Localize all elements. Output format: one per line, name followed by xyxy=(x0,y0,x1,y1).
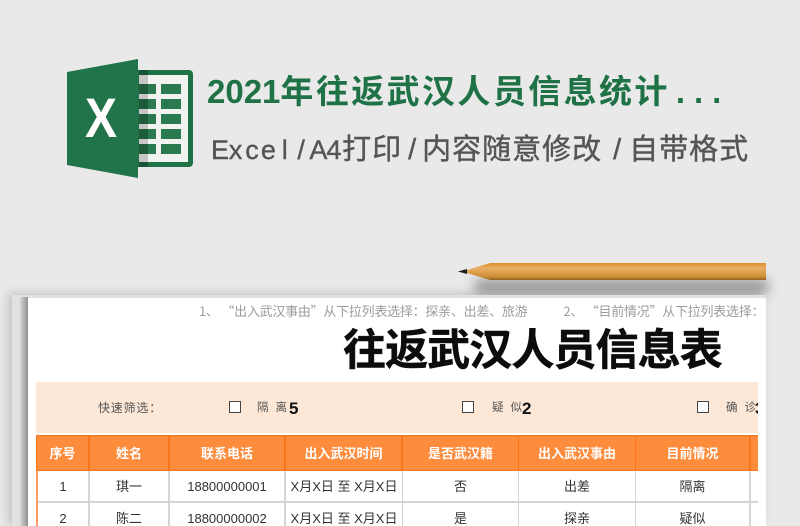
subtitle: l xyxy=(282,135,288,165)
table header band xyxy=(36,435,758,471)
sheet title: 往返武汉人员信息表 xyxy=(343,327,722,375)
icon: pencil xyxy=(458,263,766,280)
icon: Excel logo: X xyxy=(85,86,117,149)
label: isolated: 隔离 xyxy=(257,402,294,414)
row 2: 探亲 xyxy=(564,511,590,526)
header cells: 序号 xyxy=(49,446,76,461)
subtitle: 4 xyxy=(326,135,341,165)
paper inner shadow xyxy=(20,297,28,526)
subtitle: x xyxy=(229,135,242,165)
row 2: X月X日 至 X月X日 xyxy=(291,511,397,526)
table xyxy=(36,435,758,526)
subtitle: / xyxy=(408,134,416,166)
count: suspected: 2 xyxy=(522,399,531,418)
row 2: 2 xyxy=(59,511,67,526)
header cells: 联系电话 xyxy=(201,446,253,461)
subtitle: A xyxy=(309,135,327,165)
subtitle: E xyxy=(211,135,229,165)
row 1: X月X日 至 X月X日 xyxy=(291,479,397,494)
subtitle: e xyxy=(261,135,276,165)
row 1: 隔离 xyxy=(679,479,706,494)
subtitle: c xyxy=(245,135,259,165)
header cells: 出入武汉时间 xyxy=(304,446,382,461)
pencil shadow xyxy=(475,280,768,293)
header cells: 目前情况 xyxy=(666,446,718,461)
subtitle: / xyxy=(297,135,305,165)
row 2 xyxy=(38,503,758,526)
row 1: 琪一 xyxy=(116,479,142,494)
row 2: 疑似 xyxy=(679,511,706,526)
checkbox: suspected xyxy=(462,401,474,413)
count: isolated: 5 xyxy=(289,399,298,418)
title: 2021年往返武汉人员信息统计... xyxy=(207,73,730,110)
checkbox: isolated xyxy=(229,401,241,413)
row 2: 是 xyxy=(454,511,467,526)
table left border xyxy=(36,471,38,526)
row 1: 出差 xyxy=(564,479,590,494)
row 2: 陈二 xyxy=(116,511,142,526)
header cells: 是否武汉籍 xyxy=(428,446,493,461)
subtitle: / xyxy=(613,134,621,166)
row 1 xyxy=(38,471,758,501)
filter bar xyxy=(36,382,758,433)
row 1: 1 xyxy=(59,479,67,494)
header cells xyxy=(37,436,758,470)
checkbox: confirmed xyxy=(697,401,709,413)
header cells: 姓名 xyxy=(116,446,142,461)
filter label: 快速筛选： xyxy=(98,401,162,415)
row 1: 否 xyxy=(454,479,467,494)
paper white area xyxy=(28,298,766,526)
header cells: 出入武汉事由 xyxy=(538,446,616,461)
row 1: 18800000001 xyxy=(187,479,267,494)
label: suspected: 疑似 xyxy=(492,402,529,414)
icon: Excel logo xyxy=(67,59,193,178)
row 2: 18800000002 xyxy=(187,511,267,526)
paper back sheet xyxy=(12,295,766,526)
subtitle: 打印 内容随意修改 自带格式 xyxy=(342,134,749,166)
